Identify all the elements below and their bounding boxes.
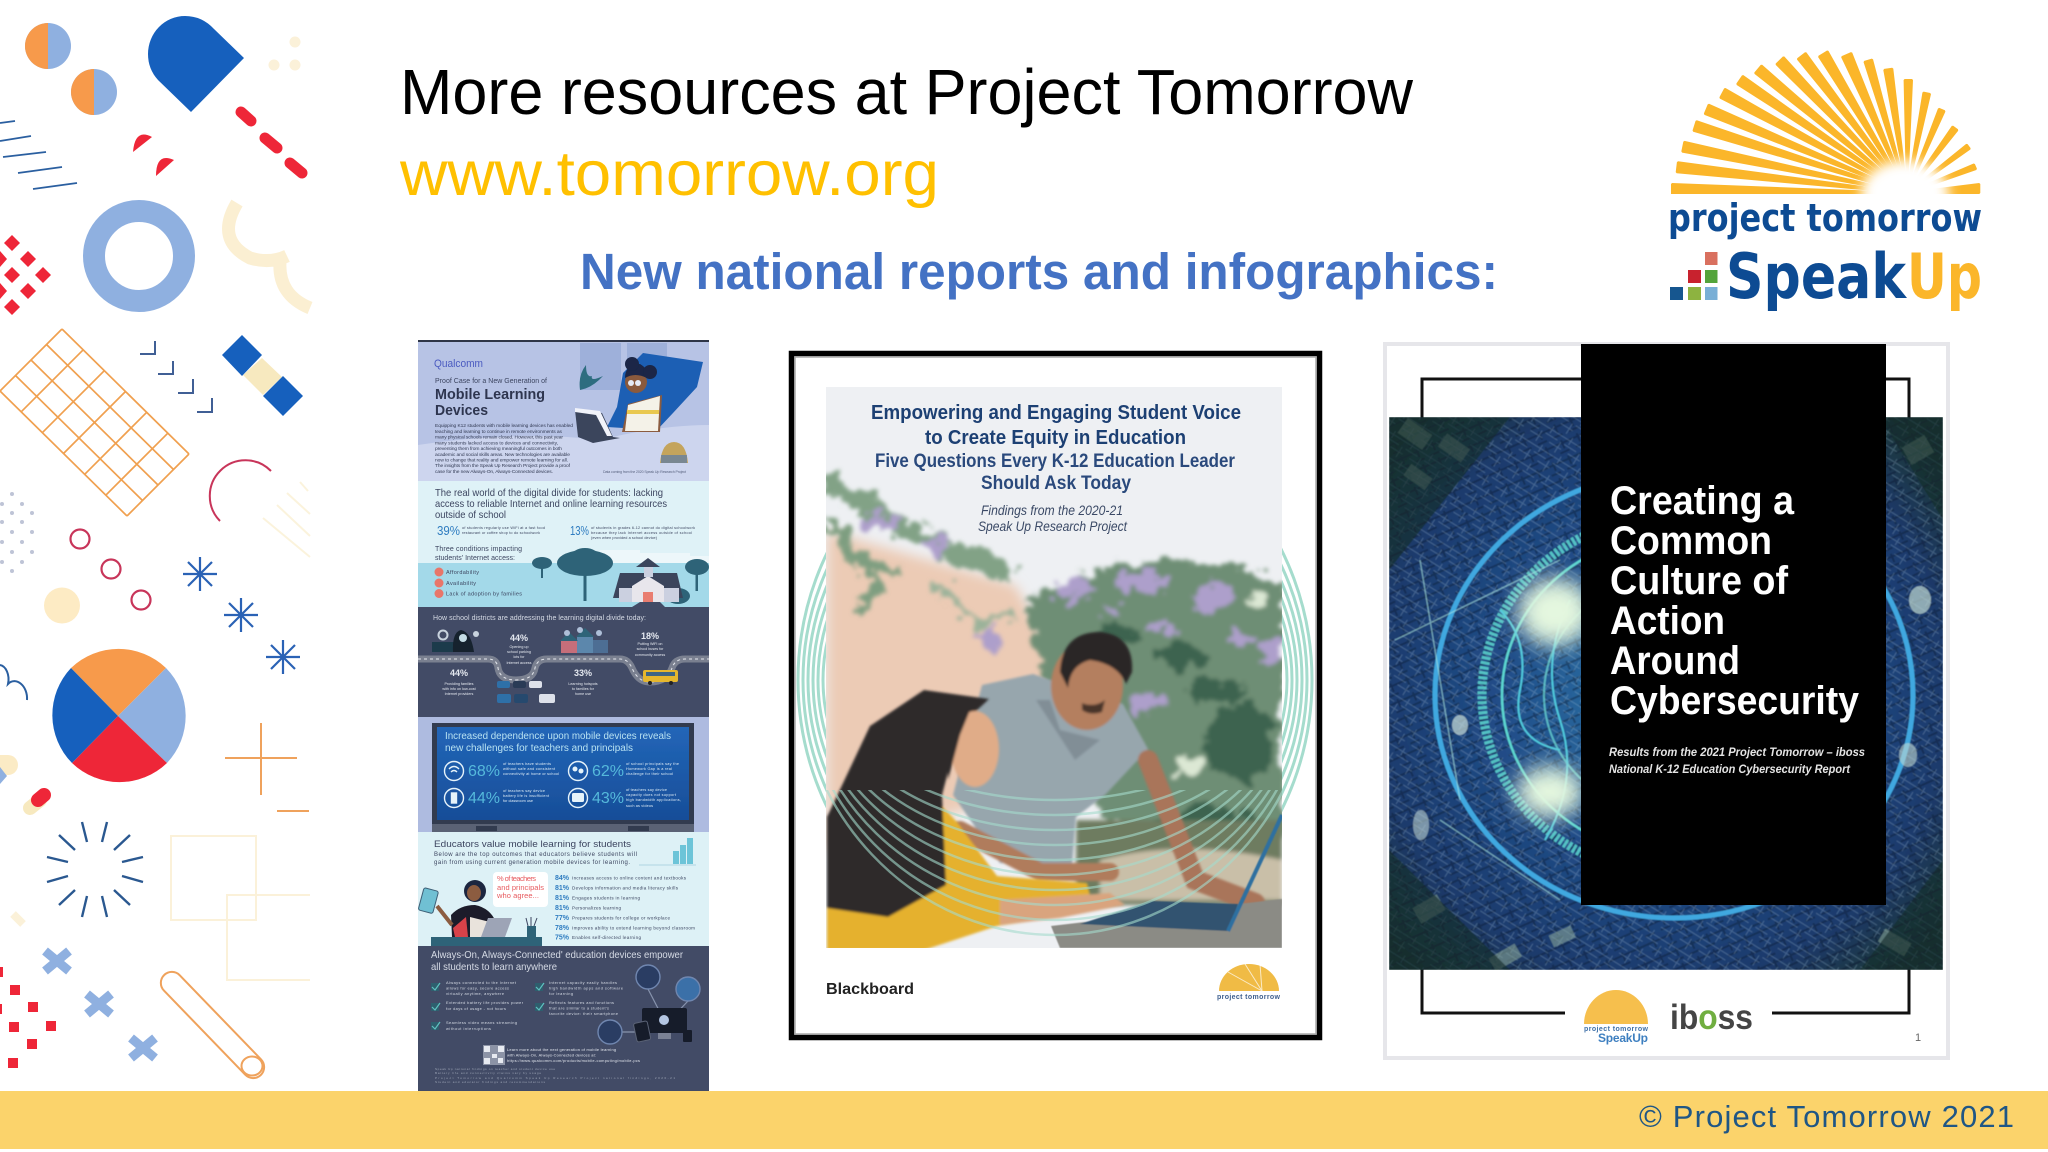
stat: 39%: of students regularly use WiFi at a fast food — [462, 526, 545, 530]
text: report title: Common — [1610, 519, 1772, 563]
text: stat descriptions: without safe and consistent — [503, 767, 556, 771]
text: stat descriptions: challenge for their school — [626, 772, 673, 776]
stat: 44% parking: Opening up — [509, 645, 529, 649]
icon: dotted grid — [0, 492, 34, 573]
text: report title — [871, 402, 1241, 494]
icon: blue ring — [94, 211, 184, 301]
text: benefit lists: without interruptions — [446, 1026, 491, 1031]
text: report title: Cybersecurity — [1610, 679, 1860, 723]
title: More resources at Project Tomorrow — [400, 56, 1414, 128]
text: intro paragraph: many physical schools remain closed. However, this past year — [435, 435, 563, 441]
list: outcomes: 77% — [555, 915, 570, 922]
icon: diamond tape — [222, 335, 303, 416]
list: conditions: Lack of adoption by families — [446, 592, 522, 598]
logo: SpeakUp small: SpeakUp — [1598, 1031, 1648, 1045]
logo: project tomorrow SpeakUp — [1668, 51, 1982, 313]
stats: percentages: 44% — [468, 790, 500, 807]
list: outcomes: 75% — [555, 934, 570, 942]
text: stat descriptions: high bandwidth applications, — [626, 798, 681, 802]
list: conditions: Availability — [446, 581, 476, 587]
text: stat descriptions: connectivity at home or school — [503, 772, 559, 776]
text: subtitle: Proof Case for a New Generation of — [435, 378, 547, 385]
text: footnotes: Speak Up national findings on teacher and student device use — [435, 1067, 555, 1071]
illustration: man — [953, 632, 1255, 903]
icon: parked cars — [497, 681, 555, 703]
icon: faint diagonal lines — [263, 482, 310, 557]
stat: 33% hotspots: home use — [575, 692, 591, 696]
list: outcomes: 81% — [555, 885, 570, 892]
list: outcomes — [555, 875, 695, 942]
page number: 1 — [1915, 1032, 1921, 1044]
website link: www.tomorrow.org — [399, 139, 939, 209]
callout: who agree... — [496, 891, 539, 900]
icon: red dashes — [241, 112, 302, 173]
logo: small project tomorrow: project tomorrow — [1217, 994, 1281, 1001]
callout: % of teachers — [497, 874, 536, 883]
stat: 13%: of students in grades 6-12 cannot do digital schoolwork — [591, 526, 695, 530]
list: outcomes: Enables self-directed learning — [572, 935, 641, 940]
icon: red squares — [0, 967, 56, 1068]
text: report title — [1610, 479, 1860, 723]
stat: 39%: 39% — [437, 523, 460, 538]
stat: 13% — [570, 523, 695, 540]
list: outcomes: Develops information and media literacy skills — [572, 886, 679, 890]
text: report title: Empowering and Engaging Student Voice — [871, 402, 1241, 424]
text: intro: Below are the top outcomes that educators believe students will — [434, 852, 637, 858]
text: stat descriptions: of teachers say device — [626, 788, 667, 792]
icon: half circles — [25, 23, 117, 115]
text: report subtitle: Speak Up Research Project — [978, 518, 1128, 534]
icon: orange grid — [0, 329, 189, 516]
stat: 13%: 13% — [570, 523, 589, 538]
infographic section: always connected — [431, 949, 700, 1084]
list: outcomes: 78% — [555, 925, 570, 932]
text: footnotes: Battery life and connectivity claims vary by usage — [435, 1071, 541, 1075]
text: heading: Educators value mobile learning for students — [434, 839, 631, 850]
stat: 18% buses: community access — [635, 653, 665, 657]
list: outcomes: Prepares students for college or workplace — [572, 916, 670, 920]
text: intro paragraph: Equipping K12 students with mobile learning devices has enabled — [435, 423, 573, 429]
icon: orange capsule — [156, 967, 269, 1083]
list: outcomes: Engages students in learning — [572, 896, 640, 900]
text: benefit lists: Reflects features and functions — [549, 1000, 614, 1005]
stat: 18% buses: 18% — [641, 631, 659, 641]
stat: 44% providers: with info on low-cost — [442, 687, 476, 691]
icon: red half drops — [133, 135, 174, 176]
text: report subtitle: National K-12 Education Cybersecurity Report — [1609, 762, 1851, 776]
stat: 33% hotspots: to families for — [572, 687, 595, 691]
decorative shapes: left column — [0, 16, 310, 1083]
stat: 33% hotspots: Learning hotspots — [568, 682, 598, 686]
decorative rings over photo — [826, 790, 1282, 936]
text: three conditions: students' Internet access: — [435, 555, 515, 562]
icon: bar chart — [639, 838, 696, 866]
text: stat descriptions: capacity does not support — [626, 793, 677, 797]
panel: Qualcomm infographic — [418, 340, 709, 1092]
text: three conditions: Three conditions impacting — [435, 546, 522, 553]
stats: percentages: 62% — [592, 763, 624, 780]
stat: 13%: (even when provided a school device) — [591, 536, 658, 540]
text: footnotes: Student and educator findings and recommendations — [435, 1080, 546, 1084]
text: headline: Mobile Learning — [435, 386, 545, 403]
text: stat descriptions: Homework Gap is a real — [626, 767, 672, 771]
stat: 44% parking: lots for — [513, 655, 525, 659]
text: section heading: outside of school — [435, 509, 506, 521]
text: report subtitle: Results from the 2021 Project Tomorrow – iboss — [1609, 745, 1865, 759]
text: stat descriptions: of teachers say device — [503, 789, 545, 793]
icon: slanted blue lines — [0, 121, 77, 189]
text: benefit lists: Seamless video means streaming — [446, 1020, 517, 1025]
text: footnotes: Project Tomorrow and Qualcomm Speak Up Research Project national findings, 2020-21 — [435, 1076, 675, 1080]
stat: 44% parking: Internet access — [506, 661, 532, 665]
stat: 44% providers — [442, 668, 476, 696]
icon: quadrant pie — [52, 649, 186, 782]
icon: red diamonds — [0, 235, 51, 315]
stat: 33% hotspots: 33% — [574, 668, 592, 678]
icon: left pills — [0, 755, 44, 924]
icon: starburst — [47, 822, 143, 917]
logo wordmark: SpeakUp: Speak — [1726, 240, 1907, 313]
list: outcomes: 84% — [555, 875, 570, 882]
stat: 44% parking — [506, 633, 532, 665]
text: benefit lists: for learning — [549, 991, 573, 996]
text: Qualcomm brand: Qualcomm — [434, 358, 483, 370]
text: learn more: Learn more about the next generation of mobile learning — [507, 1047, 616, 1052]
text: benefit lists: for days of usage - not hours — [446, 1006, 506, 1011]
icon: blue cloud curve — [0, 665, 27, 700]
icons: check boxes — [431, 983, 544, 1030]
stat: 13%: because they lack Internet access outside of school — [591, 531, 692, 535]
copyright text: © Project Tomorrow 2021 — [1639, 1099, 2014, 1134]
text: report title: Culture of — [1610, 559, 1789, 603]
icon: red arc — [210, 460, 271, 521]
text: report title: Around — [1610, 639, 1740, 683]
text: section heading: The real world of the digital divide for students: lacking — [435, 487, 663, 499]
text: stat descriptions: for classroom use — [503, 799, 533, 803]
text: stat descriptions: of teachers have students — [503, 762, 551, 766]
infographic section: districts — [418, 615, 709, 703]
text: intro: gain from using current generation mobile devices for learning. — [434, 860, 630, 866]
icon: blue asterisks — [183, 557, 300, 674]
text: benefit lists: Extended battery life provides power — [446, 1000, 524, 1005]
text: benefit lists: Internet capacity easily handles — [549, 980, 617, 985]
icon: orange plus — [225, 723, 309, 811]
text: intro paragraph: academic and social skills areas. New technologies are available — [435, 452, 570, 458]
callout — [493, 872, 548, 907]
icon: person with wifi — [432, 630, 479, 652]
icons: connected devices — [598, 965, 700, 1044]
text: report subtitle: Findings from the 2020-21 — [981, 502, 1123, 518]
text: heading: new challenges for teachers and principals — [445, 743, 633, 754]
text: intro paragraph: case for the new Always-On, Always-Connected devices. — [435, 469, 553, 475]
infographic section: educators — [418, 832, 709, 946]
text: section heading: How school districts are addressing the learning digital divide today: — [433, 615, 646, 622]
text: learn more: with Always-On, Always-Connected devices at: — [507, 1052, 596, 1058]
stats: percentages: 68% — [468, 763, 500, 780]
logo: small project tomorrow — [1217, 964, 1281, 1001]
stat: 18% buses — [635, 631, 665, 657]
text: intro paragraph: many students lacked access to devices and connectivity, — [435, 440, 558, 446]
icon: cream squiggle — [229, 203, 310, 308]
text: report title: Five Questions Every K-12 Education Leader — [875, 451, 1236, 472]
logo: iboss: iboss — [1670, 998, 1753, 1037]
text: intro paragraph: teaching and learning to continue in remote environments as — [435, 429, 563, 435]
text: caption: Data coming from the 2020 Speak Up Research Project — [603, 470, 686, 474]
text: benefit lists: high bandwidth apps and software — [549, 986, 623, 990]
icon: blue drop — [148, 16, 244, 112]
text: report title: Should Ask Today — [981, 473, 1131, 494]
list: conditions: Affordability — [446, 570, 479, 576]
icon: red small rings — [70, 530, 150, 610]
list: outcomes: 81% — [555, 895, 570, 902]
photo: parent and student — [826, 387, 1283, 950]
decorative margin rings — [796, 548, 1314, 812]
text: heading: Increased dependence upon mobile devices reveals — [445, 731, 671, 742]
text: report title: Creating a — [1610, 479, 1795, 523]
text: report title: Action — [1610, 599, 1725, 643]
text: benefit lists: virtually anytime, anywhere — [446, 991, 504, 996]
text: intro paragraph: preventing them from achieving meaningful outcomes in both — [435, 446, 562, 452]
illustration: woman at desk — [418, 880, 542, 946]
logo: SpeakUp small — [1584, 990, 1649, 1045]
icon: cream circle — [44, 588, 80, 624]
stat: 18% buses: Putting WiFi on — [637, 642, 663, 646]
text: report title: to Create Equity in Education — [925, 427, 1186, 449]
section heading: New national reports and infographics: — [580, 243, 1498, 300]
footer bar — [0, 1091, 2048, 1149]
list: outcomes: Improves ability to extend learning beyond classroom — [572, 926, 695, 930]
text: intro paragraph: The insights from the Speak Up Research Project provide a proof — [435, 463, 571, 469]
panel: Cybersecurity report — [1385, 344, 1948, 1058]
panel: Empowering student voice report — [792, 354, 1320, 1038]
list: outcomes: Increases access to online content and textbooks — [572, 876, 687, 880]
icon: chevrons — [140, 341, 212, 412]
stat: 33% hotspots — [568, 668, 598, 696]
foliage — [827, 480, 1283, 862]
infographic section: digital divide — [418, 481, 709, 607]
text: heading: all students to learn anywhere — [431, 961, 557, 973]
stat: 39%: restaurant or coffee shop to do schoolwork — [462, 531, 540, 535]
callout: and principals — [497, 883, 544, 892]
decorative frame line — [1422, 379, 1909, 1013]
logo wordmark: SpeakUp: Up — [1907, 240, 1982, 313]
photo: circuit board — [1389, 417, 1943, 971]
text: benefit lists: that are similar to a student's — [549, 1006, 609, 1010]
list: outcomes: 81% — [555, 905, 570, 912]
road — [418, 659, 709, 682]
infographic section: challenges — [418, 717, 709, 832]
text: benefit lists: allows for easy, secure access — [446, 986, 509, 990]
icon: QR code — [483, 1045, 505, 1065]
list: outcomes: Personalizes learning — [572, 906, 621, 910]
text: stat descriptions: such as videos — [626, 804, 653, 808]
illustration: trees — [532, 548, 709, 601]
stat: 44% providers: 44% — [450, 668, 468, 678]
illustration: table and laptop — [1051, 815, 1282, 948]
icon: sun rays — [1672, 51, 1979, 228]
stat: 44% parking: school parking — [507, 650, 531, 654]
text: intro paragraph: now to change that reality and empower remote learning for all. — [435, 458, 568, 464]
text: learn more: https://www.qualcomm.com/products/mobile-computing/mobile-pcs — [507, 1058, 640, 1063]
stat: 18% buses: school buses for — [637, 647, 664, 651]
black title panel — [1581, 344, 1886, 905]
icon: bus — [643, 670, 678, 685]
logo: Blackboard: Blackboard — [826, 981, 914, 998]
text: stat descriptions: of school principals say the — [626, 762, 679, 766]
illustration: woman — [827, 690, 1125, 950]
icons: stat circles — [444, 762, 588, 808]
text: benefit lists: Always connected to the Internet — [446, 980, 517, 985]
scene: background bench — [1076, 820, 1282, 905]
stat: 39% — [437, 523, 545, 538]
icon: faint squares — [171, 836, 310, 980]
icon: cream dots — [268, 36, 300, 70]
text: stat descriptions: battery life is insufficient — [503, 794, 550, 798]
text: headline: Devices — [435, 402, 488, 419]
text: section heading: access to reliable Internet and online learning resources — [435, 498, 667, 510]
stat: 44% providers: Internet providers — [445, 692, 473, 696]
icon: houses — [560, 627, 608, 653]
icon: coloured squares — [1670, 252, 1718, 300]
illustration: school — [613, 558, 690, 607]
stats: percentages: 43% — [592, 790, 624, 807]
infographic section: header — [418, 342, 709, 481]
stat: 44% providers: Providing families — [445, 682, 474, 686]
logo wordmark: project tomorrow: project tomorrow — [1668, 196, 1982, 240]
logo: SpeakUp small: project tomorrow — [1584, 1026, 1649, 1033]
text: benefit lists: favorite device: their smartphone — [549, 1011, 618, 1016]
text: heading: Always-On, Always-Connected' education devices empower — [431, 949, 683, 961]
stat: 44% parking: 44% — [510, 633, 528, 643]
icon: blue crosses — [45, 951, 155, 1058]
list: conditions — [434, 568, 522, 598]
